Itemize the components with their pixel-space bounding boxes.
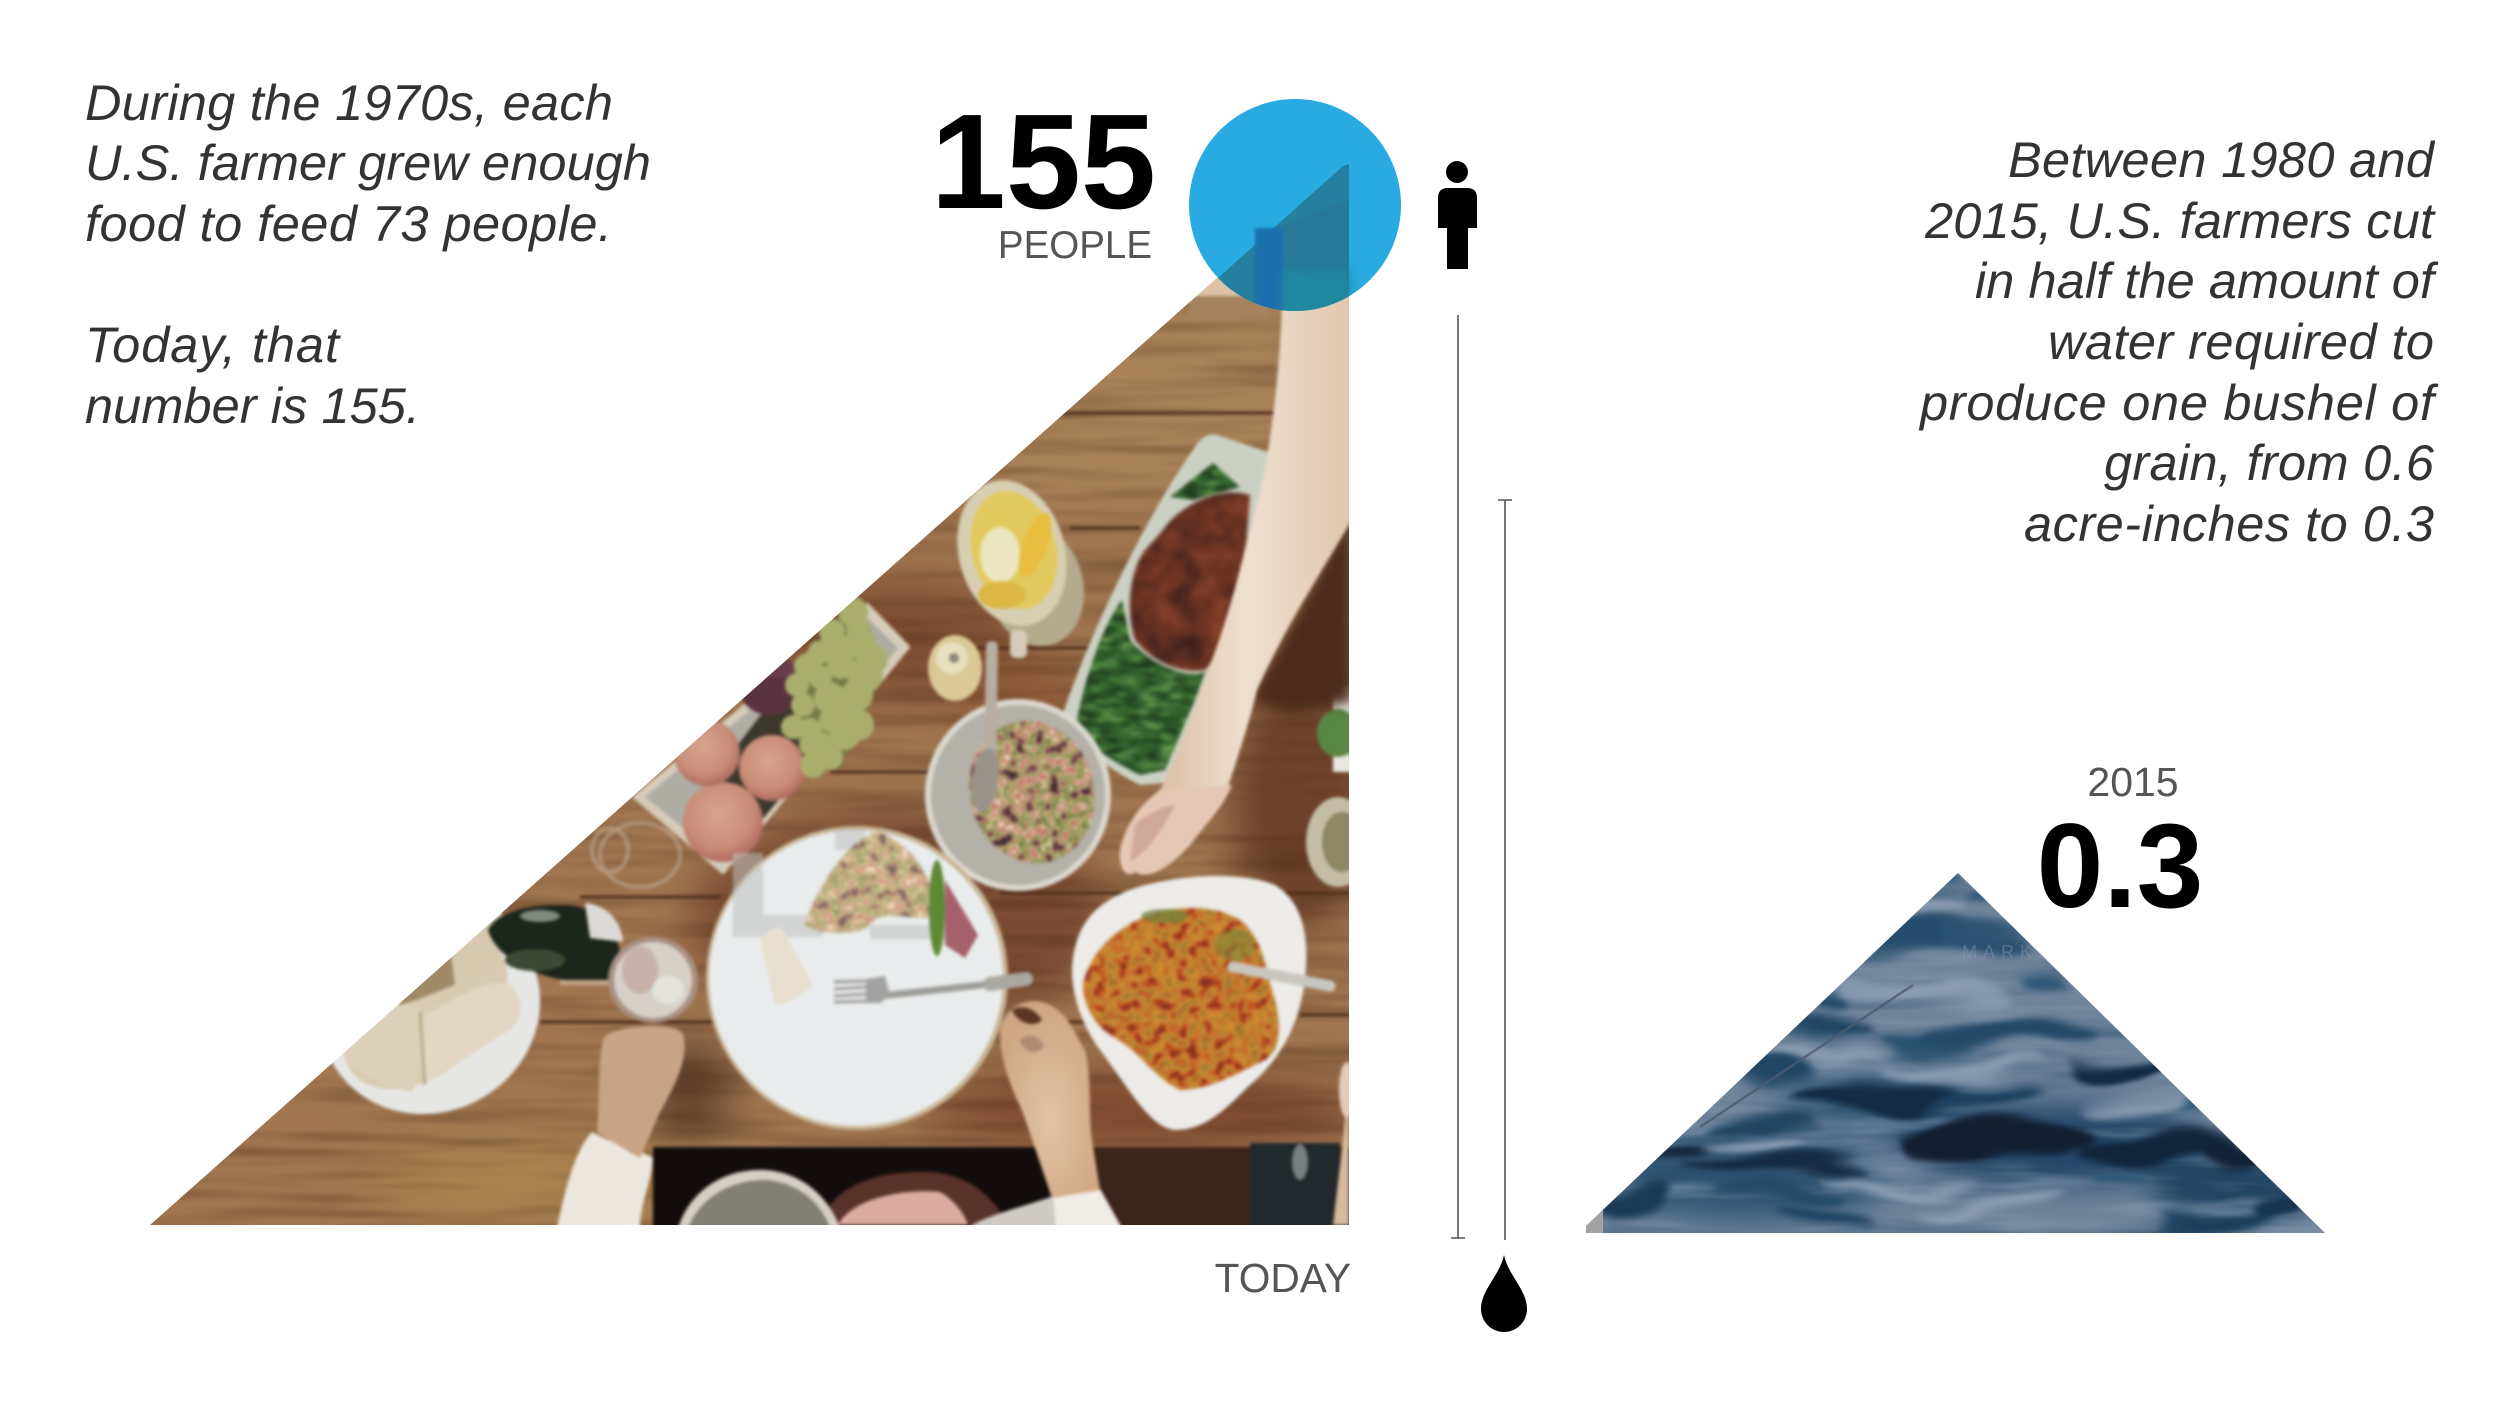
bread plate [330, 912, 542, 1116]
text block: 1970s versus today: During the 1970s, each [85, 74, 613, 131]
pepper shaker [928, 635, 982, 701]
serving arm and hand [1120, 290, 1352, 875]
fruit tray [635, 597, 908, 872]
diners at table end [557, 1062, 1355, 1228]
dining hand with wrist [1000, 1001, 1100, 1198]
text block: water reduction: acre-inches to 0.3 [2024, 495, 2434, 552]
text block: 1970s versus today: number is 155. [85, 377, 420, 434]
photo triangle: family dinner table [150, 278, 1349, 1225]
year and value: 2015, 0.3: 0.3 [2037, 799, 2203, 933]
blue circle overlapping the photo apex [1180, 99, 1401, 320]
large white plate [706, 826, 1028, 1130]
gray chip at corner [1586, 1210, 1603, 1233]
year and value: 2015, 0.3: 2015 [2087, 759, 2179, 805]
orange grain salad bowl [1072, 876, 1330, 1130]
icon: water drop [1481, 1255, 1527, 1332]
label: today: TODAY [1215, 1255, 1351, 1301]
turkey platter with green beans [1063, 434, 1280, 785]
dark shadow beside serving arm [1254, 523, 1349, 716]
hand holding glass [597, 1026, 685, 1158]
empty wine glass on table [592, 823, 680, 887]
glass in hand [608, 937, 698, 1023]
text block: 1970s versus today [85, 74, 651, 434]
plank gaps [540, 413, 1350, 1022]
white dish and leaf at far right [1315, 686, 1349, 774]
icon: person [1438, 161, 1477, 269]
text block: water reduction: in half the amount of [1975, 252, 2439, 309]
wine bottle [488, 903, 623, 985]
beige cloth behind the circle [1188, 278, 1244, 304]
photo triangle: water surface [1570, 860, 2340, 1240]
fork [834, 976, 1028, 1003]
watermark: MARKET [1962, 942, 2073, 962]
big number: 155 people: 155 [931, 86, 1156, 237]
scratch line [1700, 985, 1913, 1127]
under-table shadow [653, 1143, 1353, 1232]
text block: water reduction: produce one bushel of [1918, 374, 2439, 431]
text block: 1970s versus today: Today, that [85, 316, 341, 373]
text block: water reduction [1918, 131, 2439, 552]
lemon water pitcher [955, 478, 1086, 660]
gray salad bowl [925, 647, 1111, 891]
text block: water reduction: 2015, U.S. farmers cut [1924, 192, 2436, 249]
text block: 1970s versus today: U.S. farmer grew enough [85, 134, 651, 191]
text block: 1970s versus today: food to feed 73 people. [85, 195, 612, 252]
big number: 155 people: PEOPLE [998, 224, 1152, 267]
text block: water reduction: water required to [2048, 313, 2434, 370]
text block: water reduction: grain, from 0.6 [2104, 434, 2435, 491]
second wine glass at right edge [1304, 794, 1349, 890]
scale line: water [1498, 500, 1512, 1240]
scale line: people [1451, 315, 1465, 1238]
text block: water reduction: Between 1980 and [2008, 131, 2436, 188]
